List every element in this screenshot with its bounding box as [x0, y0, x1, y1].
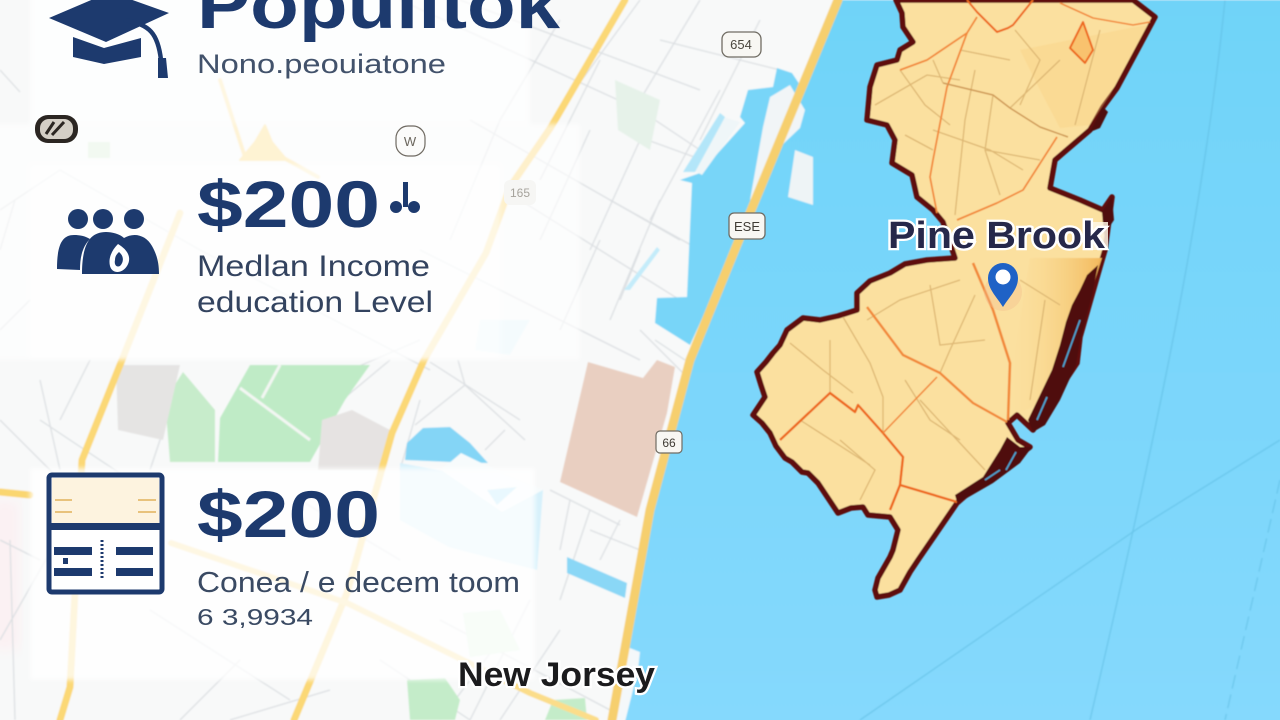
icon: people group — [57, 209, 159, 274]
value: median income: $200 — [197, 167, 380, 241]
shield: W — [396, 126, 425, 156]
New Jersey state map — [753, 0, 1155, 597]
icon: card — [47, 475, 164, 592]
road shields — [35, 32, 765, 453]
value: home value: $200 — [197, 477, 380, 551]
shield: coast route middle: ESE — [734, 219, 760, 234]
county lines — [780, 0, 1150, 510]
shield: coast route south — [656, 431, 682, 453]
shield: faded route: 165 — [510, 186, 530, 200]
caption: home value: Conea / e decem toom — [197, 567, 520, 599]
state fill and outline — [753, 0, 1155, 597]
sea — [610, 0, 1280, 720]
shield: dark oval — [35, 115, 78, 143]
park and land-use blocks — [165, 372, 215, 462]
faint internal roads — [790, 30, 1100, 500]
stat block: home value — [47, 475, 520, 630]
stat block: population — [49, 0, 560, 79]
yellow roads — [0, 0, 838, 720]
caption: figure: 6 3,9934 — [197, 604, 313, 630]
inlets — [655, 68, 800, 345]
shield: W: W — [404, 134, 417, 149]
caption: population: Nono.peouiatone — [197, 49, 446, 79]
shield: coast route north — [722, 32, 761, 57]
shield: coast route middle — [729, 213, 765, 239]
shield: faded route — [504, 180, 536, 205]
faint sea lines — [860, 0, 1280, 720]
stat block: median income — [57, 167, 433, 319]
place label: New Jersey: New Jorsey — [458, 656, 655, 694]
location pin — [984, 263, 1022, 311]
caption: median income: Medlan Income — [197, 250, 430, 283]
place label: Pine Brook: Pine Brook — [888, 215, 1106, 257]
shield: coast route north: 654 — [730, 37, 752, 52]
east shading — [1012, 258, 1102, 415]
translucent white panels — [0, 0, 580, 680]
icon: graduation cap — [49, 0, 169, 78]
lake and channels — [400, 463, 543, 570]
caption: education level: education Level — [197, 286, 433, 319]
shield: coast route south: 66 — [662, 436, 676, 450]
coastal marsh — [955, 107, 1114, 502]
icon: value suffix mark — [390, 182, 420, 213]
